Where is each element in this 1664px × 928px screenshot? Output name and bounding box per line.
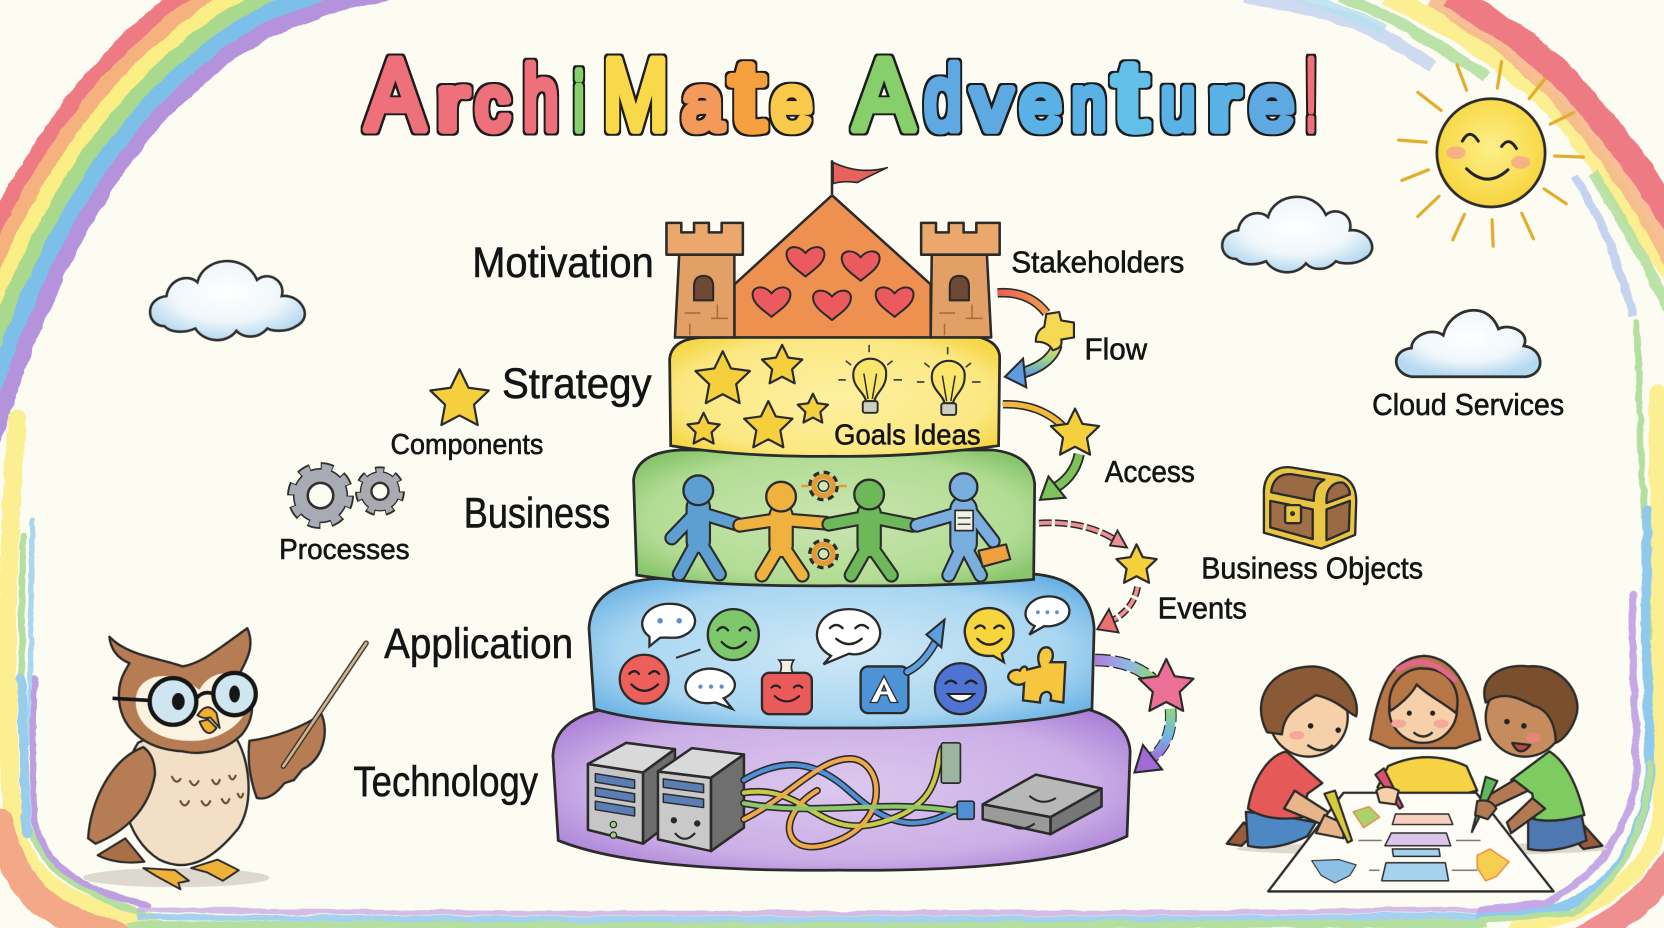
owl glasses: [113, 673, 256, 725]
activity paper: [1268, 793, 1554, 891]
title: v: [972, 61, 1011, 146]
arrow: application to technology: [1095, 659, 1193, 773]
label: Goals Ideas: Goals Ideas: [834, 420, 981, 452]
layer: motivation castle: [666, 160, 1000, 337]
label: Components: Components: [391, 429, 543, 461]
icon: gear bottom: [812, 542, 835, 566]
title: r: [437, 61, 468, 146]
title: e: [1020, 61, 1061, 146]
icon: cloud left: [150, 261, 305, 340]
label: Flow: Flow: [1085, 332, 1148, 367]
arrow: motivation to strategy (flow): [998, 293, 1074, 387]
owl head: [109, 628, 252, 753]
owl left wing: [88, 747, 155, 844]
owl pointer: [283, 643, 366, 766]
title: u: [1161, 61, 1195, 146]
icon: green face: [708, 609, 759, 660]
icon: blue face: [935, 663, 986, 714]
arrow: business to application (events): [1039, 523, 1157, 632]
owl body: [124, 731, 249, 865]
title: A: [366, 39, 425, 151]
layer: strategy: [670, 335, 1000, 456]
icon: component star: [430, 369, 489, 425]
title: t: [1113, 40, 1147, 151]
icon: sun: [1399, 62, 1583, 246]
figure: green person: [829, 480, 913, 575]
label: Business Objects: Business Objects: [1201, 550, 1423, 585]
owl tail: [98, 838, 144, 862]
icon: yellow puzzle piece: [1008, 647, 1065, 702]
pyramid of layers: [553, 160, 1130, 870]
icon: big smiling chat bubble: [817, 609, 880, 664]
owl right wing: [249, 714, 325, 798]
illustration: owl: [83, 628, 366, 889]
rainbow: left side strokes: [0, 419, 149, 928]
title: A: [854, 39, 914, 151]
layer: technology: [553, 702, 1130, 870]
icon: chat bubble 1: [642, 604, 695, 646]
rainbow: top-left arch: [0, 0, 955, 928]
shadow: [1236, 843, 1608, 855]
icon: treasure chest: [1264, 467, 1356, 549]
label: Processes: Processes: [279, 534, 410, 566]
hearts: [753, 247, 914, 320]
title: r: [1209, 61, 1239, 146]
rainbow: top-right arch: [1244, 0, 1664, 318]
owl feet: [143, 860, 239, 889]
figure: yellow person: [740, 482, 826, 575]
icon: chat bubble 2: [685, 669, 735, 709]
label: Motivation: Motivation: [472, 239, 654, 286]
owl ground shadow: [83, 868, 270, 887]
left tower: [666, 223, 743, 337]
rainbow: right side strokes: [1480, 322, 1664, 928]
icon: yellow face: [965, 608, 1013, 662]
figure: worker with badge: [917, 473, 1010, 575]
label: Application: Application: [384, 620, 573, 667]
icon: light bulb 1: [838, 345, 902, 413]
layer: application: [589, 574, 1094, 728]
label: Technology: Technology: [353, 758, 539, 805]
title: t: [730, 40, 764, 151]
icon: up arrow: [907, 620, 944, 672]
icon: red app: [762, 660, 812, 714]
icon: gears: [293, 468, 400, 523]
icon: gear top: [801, 474, 847, 498]
label: Cloud Services: Cloud Services: [1372, 387, 1564, 422]
house with roof: [734, 195, 931, 337]
child: right boy: [1479, 666, 1602, 850]
title: n: [1072, 61, 1106, 146]
title: i: [574, 57, 584, 146]
title: h: [523, 48, 558, 149]
label: Access: Access: [1105, 454, 1195, 489]
icon: chat bubble 3: [1025, 596, 1069, 635]
flag: [832, 160, 887, 194]
title: a: [682, 61, 723, 146]
illustration: children mapping: [1227, 656, 1608, 891]
icon: stars group: [687, 345, 828, 447]
icon: tangled cables: [744, 743, 974, 847]
icon: red face: [620, 655, 669, 704]
title: e: [772, 61, 812, 146]
right tower: [921, 223, 1000, 337]
owl beak: [197, 707, 220, 733]
title: c: [475, 61, 509, 146]
arrow: strategy to business (access): [1003, 404, 1099, 500]
layer: business: [634, 450, 1035, 586]
label: Events: Events: [1158, 591, 1247, 626]
icon: server 1: [588, 743, 675, 844]
owl face: [136, 673, 249, 741]
text: !: [1306, 39, 1316, 151]
icon: cloud top right: [1222, 197, 1372, 272]
icon: light bulb 2: [917, 347, 981, 415]
icon: server 2: [658, 748, 744, 851]
child: left boy: [1227, 666, 1357, 848]
icon: A app tile: [861, 666, 908, 713]
label: Business: Business: [464, 489, 610, 536]
title: e: [1250, 61, 1294, 146]
rainbow: bottom strip: [127, 909, 1486, 927]
icon: cloud services: [1396, 310, 1540, 377]
title: [366, 39, 1316, 151]
label: Strategy: Strategy: [502, 360, 652, 407]
label: Stakeholders: Stakeholders: [1011, 245, 1184, 280]
title: M: [603, 39, 669, 151]
hands and crayons: [1316, 768, 1497, 843]
figure: blue person: [672, 475, 738, 574]
child: girl: [1370, 656, 1480, 794]
icon: network box: [983, 775, 1102, 834]
title: d: [924, 48, 961, 149]
